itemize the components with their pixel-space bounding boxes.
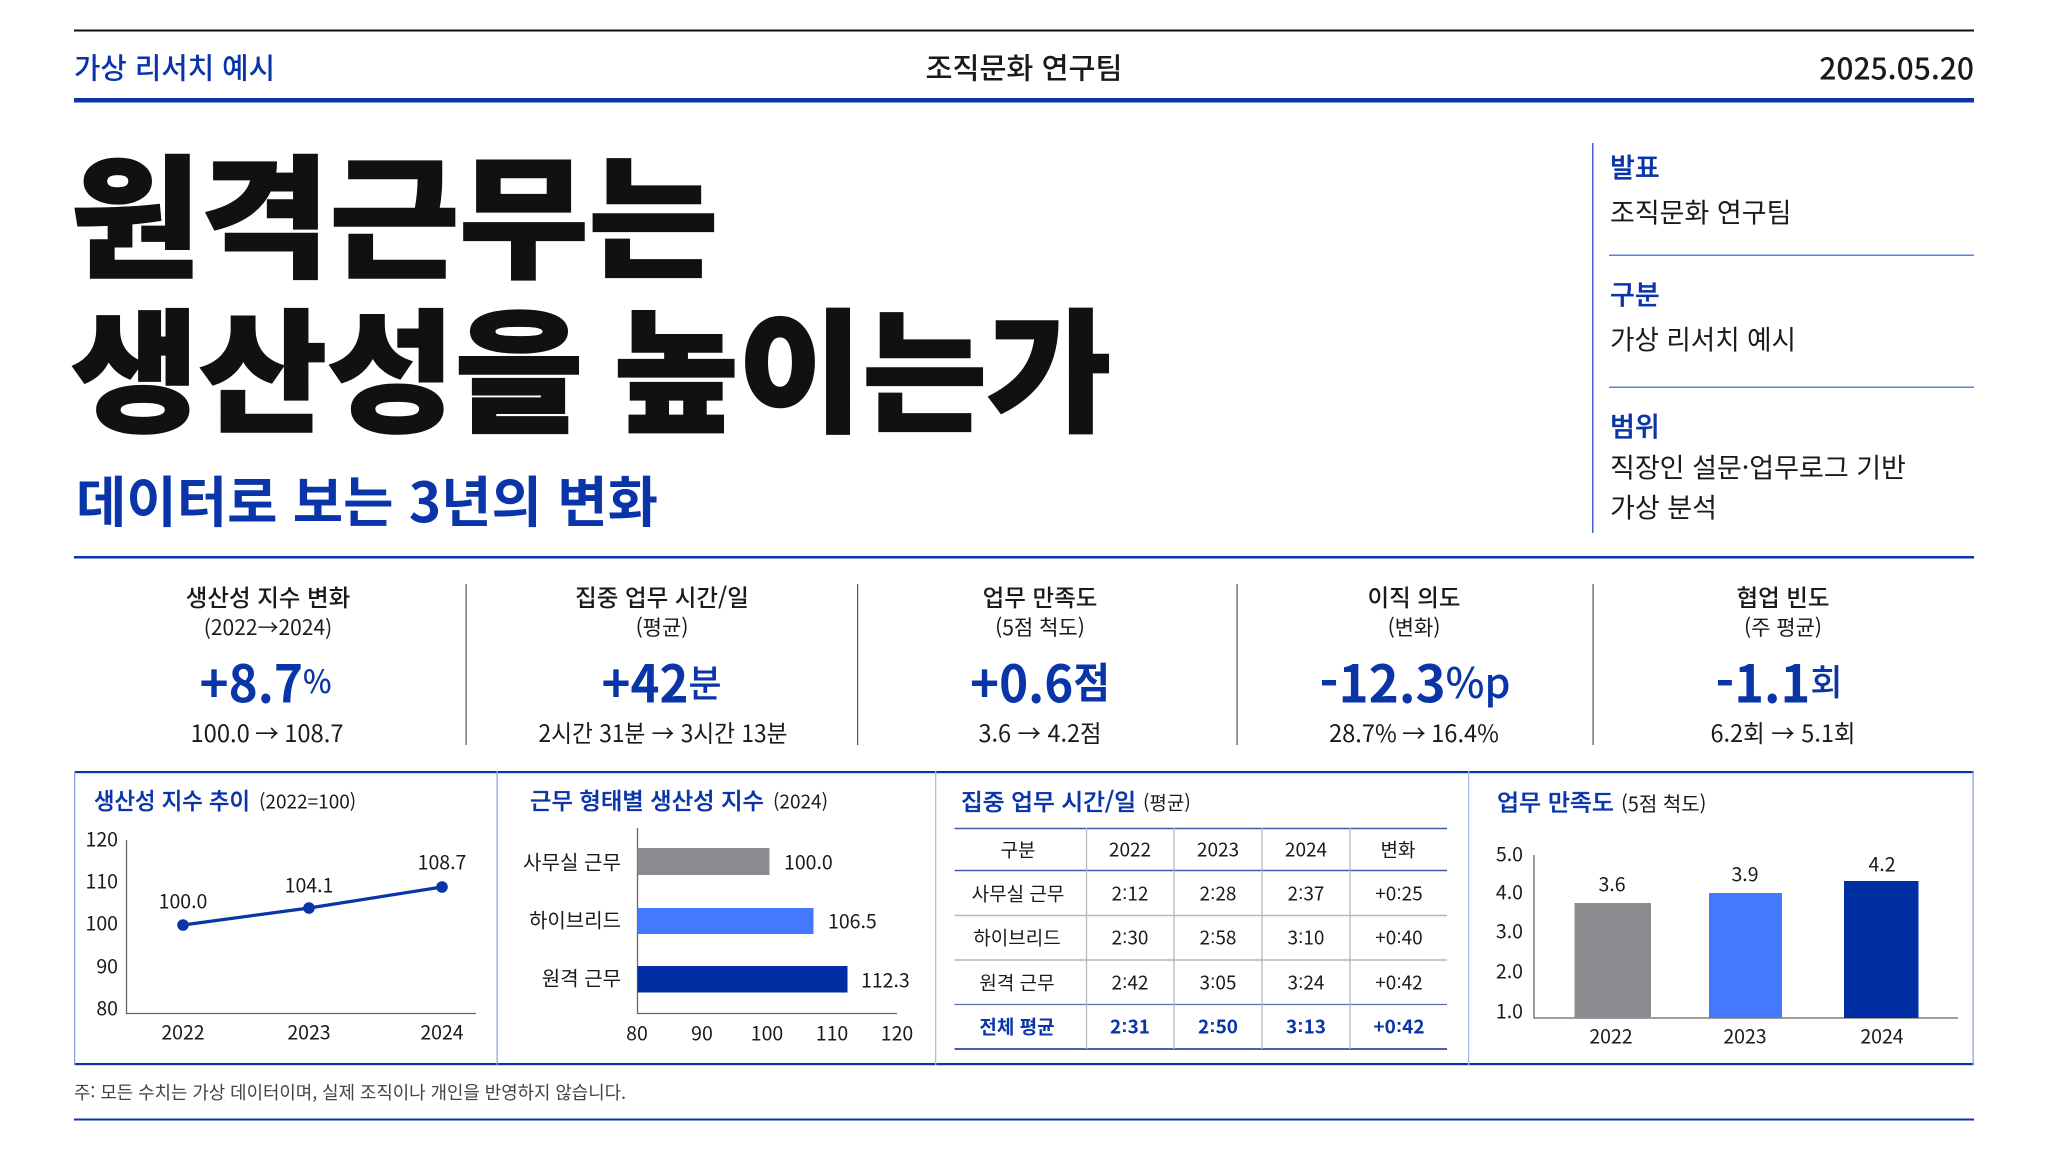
charts frame — [74, 771, 1974, 1065]
meta: publisher: 조직문화 연구팀 — [1610, 192, 1791, 230]
column chart: 3.9 — [1731, 858, 1759, 888]
horizontal bar chart: 원격 근무 — [542, 962, 621, 992]
column chart: 5.0 — [1496, 838, 1523, 868]
header bar — [74, 30, 1974, 102]
row: office: 사무실 근무 — [972, 880, 1064, 906]
line chart: 120 — [86, 824, 118, 852]
horizontal bar chart: 80 — [626, 1018, 648, 1046]
panel: focus time table: 집중 업무 시간/일 — [961, 783, 1136, 817]
horizontal bar chart: 110 — [816, 1018, 848, 1046]
column chart: 4.2 — [1868, 848, 1896, 878]
table — [954, 828, 1447, 1049]
KPI row — [74, 556, 1974, 749]
KPI: collaboration: 6.2회 → 5.1회 — [1710, 714, 1856, 749]
horizontal bar chart: 사무실 근무 — [523, 846, 621, 876]
title: 원격근무는 — [71, 114, 718, 306]
row: overall average: +0:42 — [1373, 1012, 1425, 1040]
header: left label: 가상 리서치 예시 — [74, 46, 275, 88]
KPI: collaboration: -1.1회 — [1716, 642, 1842, 718]
panel: satisfaction bar chart: 업무 만족도 — [1497, 784, 1614, 818]
line chart: 104.1 — [285, 870, 333, 898]
row: remote: +0:42 — [1375, 968, 1423, 996]
horizontal bar chart: 100.0 — [784, 846, 833, 876]
line chart: 2023 — [287, 1016, 331, 1046]
KPI: focus time: 집중 업무 시간/일 — [575, 579, 749, 613]
KPI: focus time: 2시간 31분 → 3시간 13분 — [538, 714, 788, 749]
row: hybrid: +0:40 — [1375, 924, 1423, 950]
table header: 구분 — [1001, 836, 1035, 862]
footnote: 주: 모든 수치는 가상 데이터이며, 실제 조직이나 개인을 반영하지 않습니다. — [74, 1079, 626, 1105]
KPI: collaboration: 협업 빈도 — [1736, 579, 1830, 613]
KPI: turnover — [1320, 579, 1510, 749]
sidebar: meta info — [1592, 143, 1974, 533]
KPI: turnover: (변화) — [1388, 612, 1440, 642]
row: remote: 3:24 — [1288, 968, 1324, 996]
panel: focus time table: (평균) — [1143, 788, 1191, 816]
line chart — [86, 824, 476, 1046]
KPI: productivity: 생산성 지수 변화 — [186, 579, 350, 613]
meta: scope: 가상 분석 — [1610, 486, 1717, 526]
KPI: productivity: +8.7% — [200, 642, 332, 718]
KPI: productivity: (2022→2024) — [204, 612, 332, 642]
meta: publisher: 발표 — [1610, 146, 1660, 186]
row: overall average: 3:13 — [1286, 1012, 1326, 1040]
KPI: collaboration — [1710, 579, 1856, 749]
title — [71, 114, 1111, 460]
horizontal bar chart: 112.3 — [861, 964, 910, 994]
KPI: productivity: 100.0 → 108.7 — [190, 714, 344, 749]
table header: 변화 — [1381, 836, 1415, 862]
row: office: 2:37 — [1288, 880, 1324, 906]
line chart: 80 — [96, 992, 118, 1022]
row: office: +0:25 — [1375, 880, 1423, 906]
title: 높이는가 — [614, 268, 1111, 460]
line chart: 100.0 — [159, 886, 207, 914]
header: team: 조직문화 연구팀 — [926, 46, 1122, 88]
meta: category: 가상 리서치 예시 — [1610, 318, 1796, 358]
panel: productivity trend line chart: (2022=100) — [259, 788, 356, 814]
KPI: turnover: 28.7% → 16.4% — [1329, 714, 1499, 749]
panel: productivity by work type bar chart: 근무 형태별 생산성 지수 — [530, 782, 764, 816]
panel: satisfaction bar chart: (5점 척도) — [1621, 788, 1706, 817]
column chart: 3.0 — [1496, 916, 1523, 944]
row: remote: 원격 근무 — [979, 968, 1055, 996]
column chart: 2.0 — [1496, 956, 1523, 984]
panel: satisfaction bar chart — [1496, 784, 1958, 1050]
line chart: 2022 — [161, 1016, 205, 1046]
row: hybrid: 하이브리드 — [973, 924, 1061, 950]
horizontal bar chart: 106.5 — [828, 906, 877, 934]
table header — [1001, 836, 1415, 862]
row: hybrid — [973, 924, 1423, 950]
KPI: turnover: 이직 의도 — [1367, 579, 1461, 613]
column chart: 2024 — [1860, 1020, 1904, 1050]
line chart: 100 — [86, 908, 118, 936]
KPI: productivity — [186, 579, 350, 749]
column chart: 1.0 — [1496, 996, 1523, 1024]
horizontal bar chart: 100 — [751, 1018, 783, 1046]
column chart: 3.6 — [1598, 868, 1626, 898]
meta: scope: 직장인 설문·업무로그 기반 — [1610, 446, 1906, 486]
row: overall average — [979, 1012, 1425, 1040]
panel: productivity trend line chart — [86, 782, 476, 1046]
row: remote: 2:42 — [1112, 968, 1148, 996]
row: hybrid: 3:10 — [1288, 924, 1324, 950]
meta: scope — [1610, 406, 1906, 526]
table header: 2022 — [1109, 836, 1151, 862]
KPI: turnover: -12.3%p — [1320, 642, 1510, 718]
KPI: satisfaction — [970, 579, 1110, 749]
meta: category: 구분 — [1610, 274, 1660, 312]
column chart: 2023 — [1723, 1020, 1767, 1050]
meta: category — [1610, 274, 1796, 358]
KPI: focus time: (평균) — [636, 612, 688, 642]
horizontal bar chart: 120 — [881, 1018, 913, 1046]
column chart: 4.0 — [1496, 876, 1523, 906]
row: overall average: 2:31 — [1110, 1012, 1150, 1040]
panel: productivity by work type bar chart: (2024) — [773, 788, 828, 814]
meta: scope: 범위 — [1610, 406, 1660, 444]
KPI: satisfaction: 3.6 → 4.2점 — [978, 714, 1102, 749]
KPI: focus time — [538, 579, 788, 749]
KPI: satisfaction: (5점 척도) — [995, 612, 1085, 642]
KPI: collaboration: (주 평균) — [1744, 612, 1822, 642]
panel: productivity by work type bar chart — [523, 782, 913, 1046]
line chart: 110 — [86, 866, 118, 894]
KPI: focus time: +42분 — [602, 642, 722, 718]
line chart: 108.7 — [418, 846, 466, 876]
row: hybrid: 2:58 — [1200, 924, 1236, 950]
row: overall average: 전체 평균 — [979, 1012, 1055, 1040]
table header: 2023 — [1197, 836, 1239, 862]
row: office: 2:28 — [1200, 880, 1236, 906]
bottom rule — [74, 1118, 1974, 1120]
horizontal bar chart: 하이브리드 — [529, 904, 621, 934]
header: date: 2025.05.20 — [1819, 44, 1974, 88]
row: office — [972, 880, 1423, 906]
column chart — [1496, 838, 1958, 1050]
line chart: 2024 — [420, 1016, 464, 1046]
row: overall average: 2:50 — [1198, 1012, 1238, 1040]
column chart: 2022 — [1589, 1020, 1633, 1050]
title: 생산성을 — [71, 268, 583, 460]
row: hybrid: 2:30 — [1112, 924, 1148, 950]
KPI: satisfaction: 업무 만족도 — [983, 579, 1097, 613]
horizontal bar chart — [523, 828, 913, 1046]
table header: 2024 — [1285, 836, 1327, 862]
panel: focus time table — [954, 783, 1447, 1049]
row: remote — [979, 968, 1423, 996]
subtitle: 데이터로 보는 3년의 변화 — [76, 458, 658, 538]
panel: productivity trend line chart: 생산성 지수 추이 — [94, 782, 250, 816]
row: remote: 3:05 — [1200, 968, 1236, 996]
horizontal bar chart: 90 — [691, 1018, 713, 1046]
KPI: satisfaction: +0.6점 — [970, 642, 1110, 718]
meta: publisher — [1610, 146, 1791, 230]
line chart: 90 — [96, 950, 118, 980]
row: office: 2:12 — [1112, 880, 1148, 906]
